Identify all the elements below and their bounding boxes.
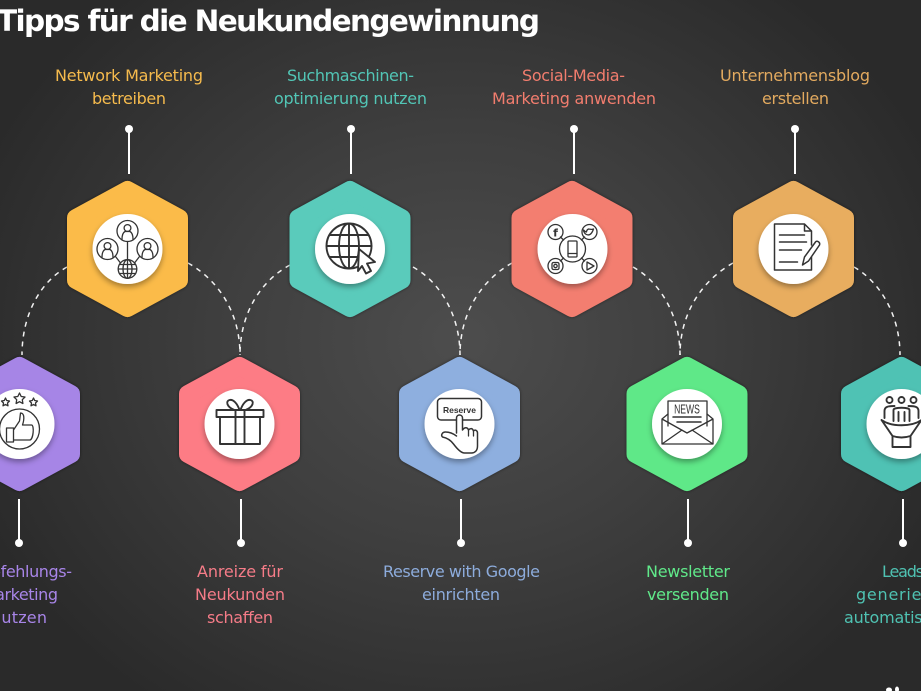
stem with dot [125,125,133,174]
label: Suchmaschinenoptimierung: Suchmaschinen- [287,66,414,85]
dashed connectors [22,263,900,355]
label: Unternehmensblog: Unternehmensblog [720,66,870,85]
label: Unternehmensblog: erstellen [762,89,829,108]
icon: reserve button with hand [424,389,494,459]
label: Reserve with Google: Reserve with Google [383,562,540,581]
step: Leads generieren [844,366,921,627]
label: Newsletter: versenden [647,585,729,604]
step: Empfehlungsmarketing [0,366,72,627]
label: Reserve with Google: einrichten [422,585,500,604]
label: Anreize: Anreize für [197,562,283,581]
hexagon [850,366,921,482]
stem with dot [457,499,465,547]
label: Newsletter: Newsletter [646,562,730,581]
step: Newsletter [636,366,738,604]
hexagon [76,190,179,308]
icon: envelope with newspaper [652,389,722,459]
label: Network Marketing: betreiben [92,89,166,108]
icon: reserve button with hand: Reserve [443,405,476,415]
icon: document with pen [758,214,828,284]
label: Suchmaschinenoptimierung: optimierung nutzen [274,89,427,108]
step: Network Marketing [55,66,203,308]
stem with dot [684,499,692,547]
label: Leads generieren [844,562,921,627]
icon: social media network: f [553,226,558,240]
stem with dot [791,125,799,174]
stem with dot [347,125,355,174]
stem with dot [570,125,578,174]
hexagon [298,190,402,308]
label: Network Marketing [55,66,203,108]
hexagon [408,366,511,482]
icon: social media network [538,214,608,284]
label: Network Marketing: Network Marketing [55,66,203,85]
hexagon [636,366,738,482]
label: Empfehlungsmarketing [0,562,72,627]
step: Suchmaschinenoptimierung [274,66,427,308]
hexagon [520,190,624,308]
hexagon [742,190,845,308]
icon: network of people and globe [92,214,162,284]
label: Social-Media-Marketing: Social-Media- [522,66,625,85]
label: Unternehmensblog [720,66,870,108]
step: Social-Media-Marketing [492,66,656,308]
stem with dot [237,499,245,547]
step: Unternehmensblog [720,66,870,308]
icon: gift box [204,389,274,459]
label: Anreize [195,562,285,627]
step: Anreize [188,366,291,627]
label: Social-Media-Marketing: Marketing anwenden [492,89,656,108]
hexagon [0,366,71,482]
step: Reserve with Google [383,366,540,604]
stem with dot [15,499,23,547]
label: Suchmaschinenoptimierung [274,66,427,108]
icon: envelope with newspaper: NEWS [674,403,700,417]
hexagon [188,366,291,482]
label: Anreize: Neukunden [195,585,285,604]
stem with dot [899,499,907,547]
label: Anreize: schaffen [207,608,273,627]
icon: globe with cursor [315,214,385,284]
title: Tipps für die Neukundengewinnung [0,4,540,38]
label: Social-Media-Marketing [492,66,656,108]
label: Reserve with Google [383,562,540,604]
logo fragment [886,686,899,691]
icon: people in funnel [866,389,921,459]
label: Newsletter [646,562,730,604]
icon: thumbs up with stars [0,389,54,459]
